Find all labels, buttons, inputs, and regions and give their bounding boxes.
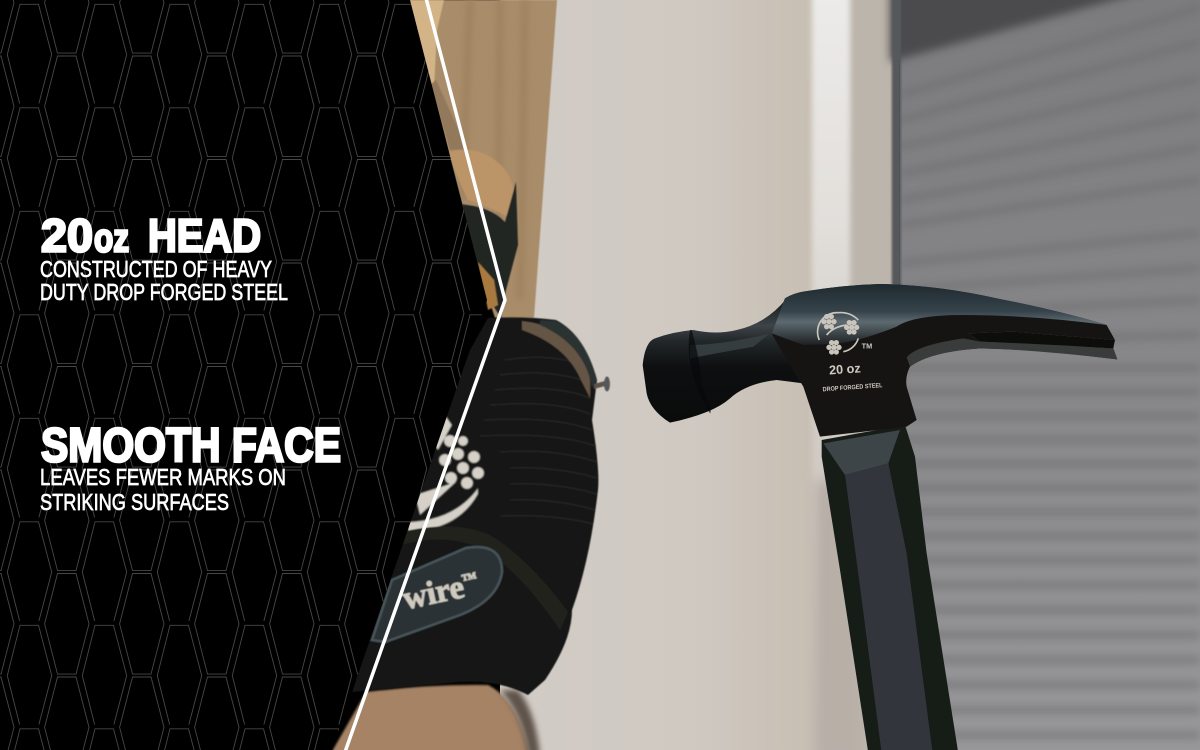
- engraved logo: [818, 313, 859, 355]
- handle: [822, 425, 958, 750]
- hammer head: [643, 284, 1117, 437]
- feature: smooth face: [40, 420, 341, 515]
- heading: HEAD: [148, 210, 261, 262]
- pillar: [812, 0, 896, 750]
- upper glove finger: [458, 182, 518, 318]
- upper finger tip: [448, 150, 514, 216]
- engraved text: 20 oz: [829, 361, 861, 378]
- shutter dark top corner: [890, 0, 1150, 62]
- head body: [772, 284, 1117, 437]
- strap badge: [372, 547, 502, 642]
- gloved hand: [352, 150, 610, 695]
- glove ribbing: [480, 357, 597, 524]
- wrist strap: [385, 526, 568, 630]
- strap wordmark: wire: [400, 569, 468, 617]
- nail: [594, 376, 610, 392]
- hammer: [643, 284, 1117, 750]
- head reflection: [772, 284, 1107, 345]
- main glove body: [352, 317, 598, 695]
- panel: black hexagon pattern: [0, 0, 487, 750]
- heading: oz: [94, 217, 129, 261]
- wooden post: [405, 0, 557, 318]
- white chevron line: [345, 0, 505, 750]
- arm and skin: [330, 685, 540, 750]
- hammer head: DROP FORGED STEEL: [822, 382, 883, 393]
- description: CONSTRUCTED OF HEAVY: [40, 256, 272, 282]
- heading: 20: [41, 210, 93, 262]
- heading: SMOOTH FACE: [41, 420, 341, 473]
- feature: 20oz head: [40, 210, 288, 305]
- hammer head: TM: [862, 342, 872, 351]
- glove logo: [408, 415, 484, 532]
- description: DUTY DROP FORGED STEEL: [40, 279, 288, 305]
- glove lace edge: [522, 321, 590, 398]
- shutter slats: [900, 8, 1200, 735]
- description: STRIKING SURFACES: [40, 489, 229, 515]
- photo background: wall and shutter: [500, 0, 1200, 750]
- description: LEAVES FEWER MARKS ON: [40, 464, 286, 490]
- poll: [643, 298, 803, 423]
- strap wordmark: TM: [461, 570, 478, 583]
